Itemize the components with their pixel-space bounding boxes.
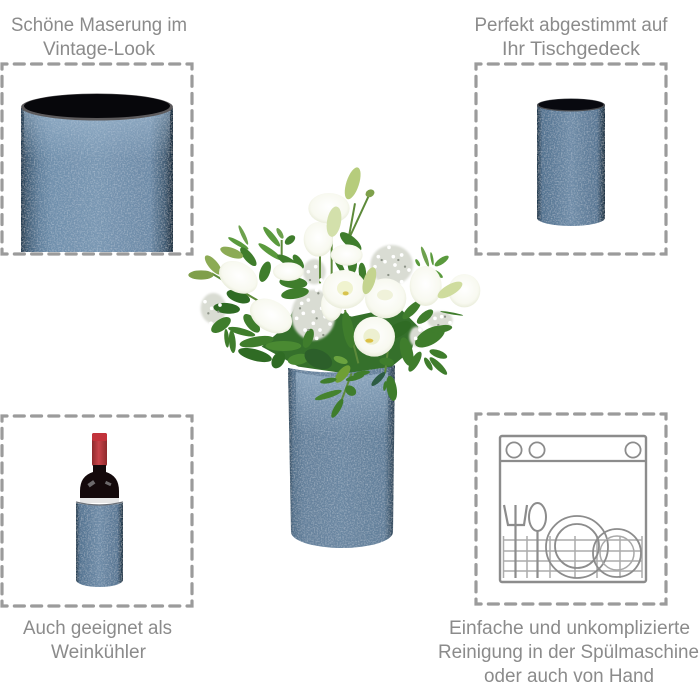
leaves: [208, 224, 463, 377]
foreground leaves on vase: [314, 363, 399, 419]
cooler vase: [76, 502, 123, 587]
caption: Reinigung: Einfache und unkomplizierte: [449, 618, 690, 639]
panel: table setting: [476, 64, 666, 254]
panel: dishwasher: [476, 414, 666, 604]
panel: vintage look close-up: [2, 64, 192, 254]
dashed frame: [476, 64, 666, 254]
wine bottle: [80, 433, 119, 503]
heading: Schöne Maserung: [11, 15, 187, 60]
baby's breath base: [201, 245, 453, 347]
stems: [212, 197, 388, 400]
panel: wine cooler: [2, 416, 192, 606]
green buds: [188, 166, 376, 280]
caption: Weinkühler: Auch geeignet als: [23, 618, 172, 639]
heading: Perfekt abgestimmt: [474, 15, 668, 60]
white flowers: [213, 193, 480, 357]
small vase: [537, 98, 605, 226]
flower shading and buds: [324, 205, 465, 345]
caption: Reinigung: [438, 618, 699, 687]
heading: Perfekt abgestimmt: Perfekt abgestimmt auf: [474, 15, 668, 36]
caption: Reinigung: oder auch von Hand: [484, 666, 654, 687]
heading: Schöne Maserung: Vintage-Look: [43, 39, 156, 60]
vase close-up: [21, 94, 173, 252]
flower bouquet: [188, 166, 480, 419]
heading: Perfekt abgestimmt: Ihr Tischgedeck: [502, 39, 641, 60]
dashed frame: [2, 64, 192, 254]
main vase: [288, 365, 395, 548]
caption: Weinkühler: [23, 618, 172, 663]
heading: Schöne Maserung: Schöne Maserung im: [11, 15, 187, 36]
dashed frame: [2, 416, 192, 606]
caption: Weinkühler: Weinkühler: [51, 642, 147, 663]
icon: dishwasher: [500, 436, 646, 582]
dark foliage mass: [262, 300, 418, 373]
baby's breath dots: [205, 247, 450, 338]
dashed frame: [476, 414, 666, 604]
caption: Reinigung: Reinigung in der Spülmaschine: [438, 642, 699, 663]
